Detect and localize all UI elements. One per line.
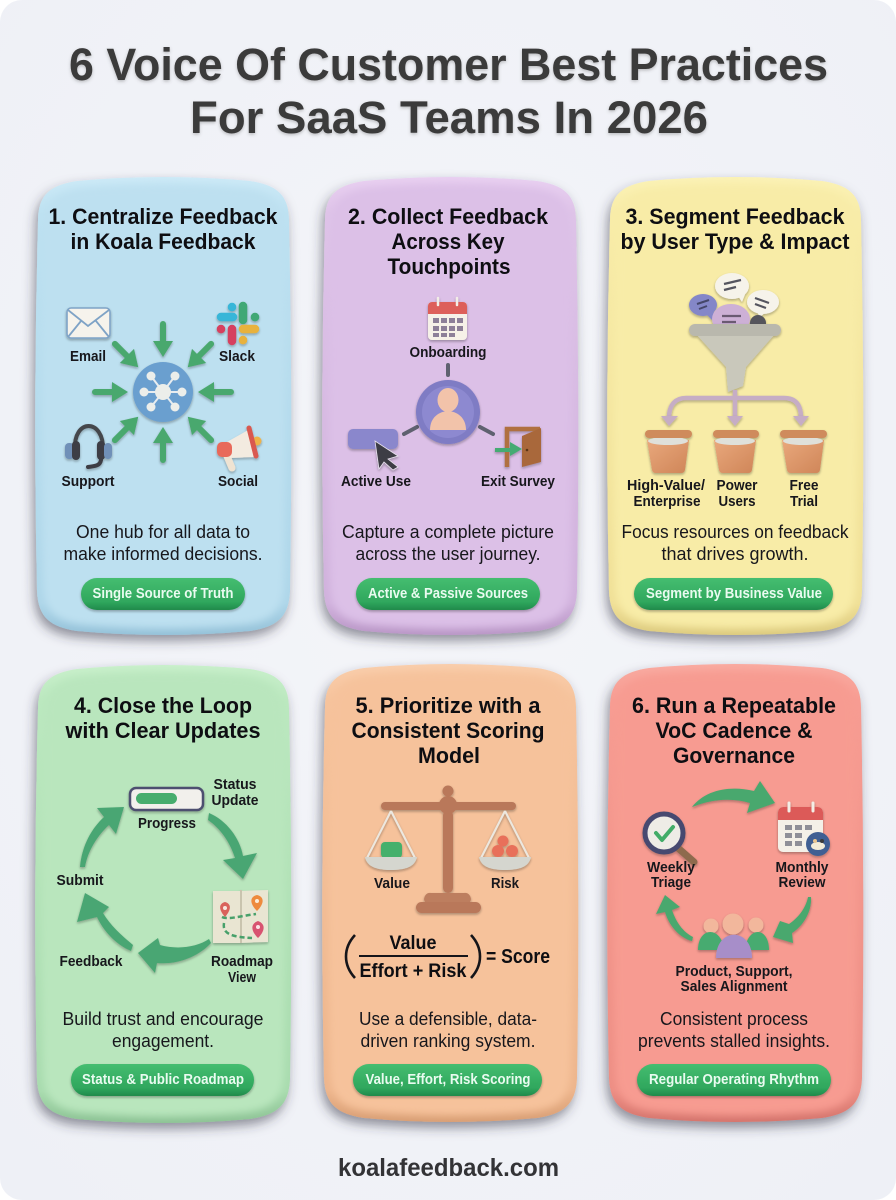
description: Consistent process [660,1009,808,1029]
loop arrow: review to alignment [773,897,811,943]
label: Monthly Review [776,860,828,891]
labels: value and risk [374,876,520,892]
card surface [607,664,863,1122]
scoring formula: = Score [486,946,550,968]
arrows pointing to hub [92,321,234,463]
loop arrow: submit to progress [80,807,124,867]
title: 6 Voice Of Customer Best Practices [69,39,828,90]
icon: calendar with badge [778,803,830,856]
title [69,39,828,143]
label: Active Use: Active Use [341,474,411,490]
branching arrows [669,390,801,418]
label: Status Update: Status [214,777,256,793]
label: Social: Social [218,474,258,490]
label: alignment: Product, Support, [676,964,792,980]
scoring formula [346,933,550,982]
panel: 6. Run a Repeatable [607,664,863,1122]
label: Monthly Review: Review [778,875,826,891]
connectors [404,365,493,434]
description [638,1009,830,1051]
icon: bucket High-Value [645,430,692,473]
heading: Across Key [392,229,505,254]
pill: Status & Public Roadmap [71,1064,254,1096]
heading: 2. Collect Feedback [348,204,549,229]
label: Status Update [212,777,258,809]
pill: Single Source of Truth: Single Source of Truth [92,586,234,602]
description: Focus resources on feedback [622,522,849,542]
description: that drives growth. [662,544,808,564]
heading: 6. Run a Repeatable [632,693,836,718]
scoring formula: Effort + Risk [360,961,467,982]
arrowheads [661,416,809,426]
heading [348,204,549,279]
panel: 1. Centralize Feedback [35,177,291,635]
description: Build trust and encourage [62,1009,264,1029]
icon: bucket Free Trial [780,430,827,473]
card surface [322,664,578,1122]
labels: segments: High-Value/ [627,478,705,494]
label: alignment: Sales Alignment [680,979,788,995]
icon: exit door [495,428,541,467]
labels: segments: Enterprise [634,494,700,510]
loop arrow: triage to review [692,781,775,813]
label: Feedback: Feedback [60,954,123,970]
title: For SaaS Teams In 2026 [190,92,708,143]
pill: Segment by Business Value: Segment by Business Value [646,586,822,602]
description [64,522,262,564]
description [342,522,554,564]
description: Use a defensible, data- [359,1009,537,1029]
labels: segments: Trial [790,494,818,510]
icon: Slack logo [221,306,255,341]
heading: Governance [673,743,795,768]
scoring formula: Value [390,933,436,954]
pill: Regular Operating Rhythm [637,1064,831,1096]
icon: feedback bubbles [689,273,779,334]
description: make informed decisions. [64,544,262,564]
description: across the user journey. [356,544,540,564]
loop arrow: feedback to submit [77,893,133,951]
panel: 3. Segment Feedback [607,177,863,635]
description: prevents stalled insights. [638,1031,830,1051]
icon: support headset [65,426,112,467]
heading: Model [418,743,480,768]
heading [48,204,278,254]
heading [620,204,850,254]
icon: central hub [133,362,193,422]
labels: segments: Users [718,494,756,510]
panel: 2. Collect Feedback [322,177,578,635]
pill: Active & Passive Sources [356,578,540,610]
icon: email envelope [67,308,110,338]
label: Roadmap View [211,954,273,986]
panel: 5. Prioritize [322,664,578,1122]
labels: segments: Free [790,478,818,494]
loop arrow: status to roadmap [208,813,257,879]
label: Onboarding: Onboarding [410,345,486,361]
heading: with Clear Updates [65,718,260,743]
description: driven ranking system. [360,1031,536,1051]
pill: Segment by Business Value [634,578,833,610]
pill: Active & Passive Sources: Active & Passive Sources [368,586,528,602]
icon: calendar [428,298,467,340]
heading: Consistent Scoring [352,718,544,743]
card surface [35,177,291,635]
loop arrow: roadmap to feedback [138,938,211,973]
label: Exit Survey: Exit Survey [481,474,555,490]
pill: Regular Operating Rhythm: Regular Operating Rhythm [649,1072,819,1088]
panel: 4. Close the Loop [35,665,291,1123]
label: Weekly Triage [647,860,695,891]
label: Monthly Review: Monthly [776,860,828,876]
description: Capture a complete picture [342,522,554,542]
icon: balance scale [365,786,531,913]
labels: segments [627,478,818,510]
heading: 5. Prioritize with a [356,693,541,718]
label: Roadmap View: Roadmap [211,954,273,970]
card surface [322,177,578,635]
icon: button and cursor [348,429,398,470]
heading: in Koala Feedback [70,229,256,254]
label: Submit: Submit [56,873,104,889]
description: One hub for all data to [76,522,250,542]
heading [65,693,260,743]
icon: magnifier with check [645,814,694,862]
icon: bucket Power Users [713,430,759,473]
pill: Value, Effort, Risk Scoring: Value, Effort, Risk Scoring [366,1072,530,1088]
heading [632,693,836,768]
pill: Value, Effort, Risk Scoring [353,1064,542,1096]
card surface [35,665,291,1123]
label: Slack: Slack [219,349,256,365]
description: engagement. [112,1031,214,1051]
icon: roadmap [213,890,268,943]
label: Weekly Triage: Triage [651,875,691,891]
description [62,1009,264,1051]
icon: funnel [689,324,781,392]
labels: segments: Power [716,478,758,494]
label: Weekly Triage: Weekly [647,860,695,876]
heading: by User Type & Impact [620,229,850,254]
loop arrow: alignment to triage [656,895,693,941]
labels: value and risk: Risk [491,876,520,892]
description [622,522,849,564]
heading [352,693,544,768]
label: Roadmap View: View [228,970,257,986]
heading: 4. Close the Loop [74,693,252,718]
pill: Single Source of Truth [81,578,245,610]
icon: team [698,914,769,958]
heading: Touchpoints [388,254,510,279]
card surface [607,177,863,635]
label: Email: Email [70,349,106,365]
heading: VoC Cadence & [656,718,813,743]
label: Status Update: Update [212,793,258,809]
icon: progress bar [130,788,203,810]
label: alignment [676,964,792,995]
heading: 3. Segment Feedback [626,204,845,229]
footer: website: koalafeedback.com [338,1154,559,1182]
labels: value and risk: Value [374,876,410,892]
icon: user in circle [416,380,480,444]
pill: Status & Public Roadmap: Status & Public Roadmap [82,1072,244,1088]
label: Progress: Progress [138,816,196,832]
icon: social megaphone [217,428,262,468]
heading: 1. Centralize Feedback [48,204,278,229]
label: Support: Support [62,474,115,490]
description [359,1009,537,1051]
